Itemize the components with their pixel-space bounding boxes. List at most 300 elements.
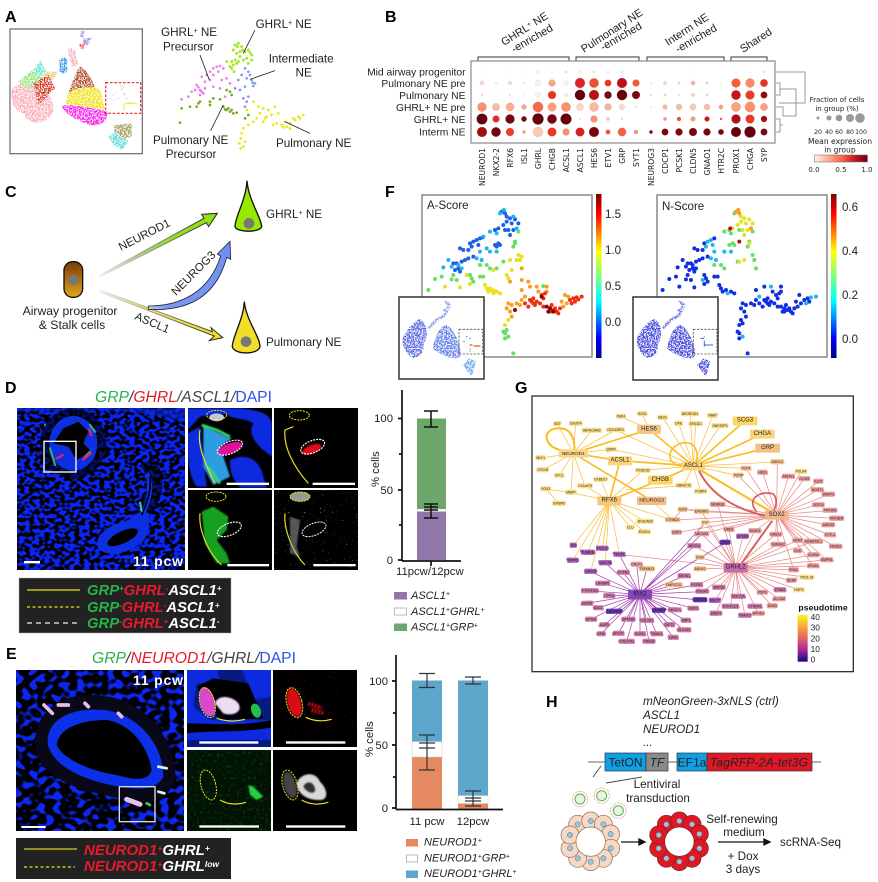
network leaf genes: NEUROD4 (682, 412, 698, 416)
panel D: bar legend (394, 590, 485, 634)
panel D: micrograph legend: ASCL1 (167, 616, 220, 632)
column gene labels: ASCL1 (576, 148, 585, 172)
network leaf genes: LIAS1 (669, 635, 678, 639)
network leaf genes: AMOS1 (783, 474, 794, 478)
rotated group headings: -enriched (674, 22, 719, 56)
panel E: bar legend: GRP (482, 852, 506, 864)
panel D: bar legend: GHRL (450, 606, 481, 618)
panel A: zoomed NE scatter (180, 43, 303, 148)
network leaf genes: DIOR57 (653, 609, 665, 613)
panel E: micrograph legend: low (205, 859, 220, 869)
panel B legends (808, 96, 873, 174)
leader lines for panel A labels (200, 30, 310, 133)
network leaf genes: TSPAN13 (639, 567, 654, 571)
network leaf genes: C12orf75 (578, 484, 592, 488)
network leaf genes: DSP (702, 521, 710, 525)
label: intermediate NE: Intermediate (269, 53, 334, 66)
panel F: A-Score (399, 194, 621, 379)
panel E: micrograph legend: + (205, 843, 210, 853)
panel E: micrograph legend (16, 838, 231, 879)
network hub genes: ASCL1 (684, 463, 703, 469)
network hub genes: HES6 (641, 426, 657, 432)
network leaf genes: CTNNA1 (748, 605, 762, 609)
network leaf genes: YPD1-24 (800, 575, 814, 579)
label: pulmonary NE: Pulmonary NE (276, 137, 352, 150)
network leaf genes: LRRC8 (585, 570, 596, 574)
panel H: medium labels: + Dox (728, 850, 759, 863)
panel E: title: GRP/NEUROD1/GHRL/DAPI (92, 650, 296, 667)
column gene labels: SYP (760, 148, 769, 162)
panel D: ASCL1 channel inset (274, 490, 358, 570)
network leaf genes: MLLT7 (710, 599, 720, 603)
panel B legends: 1.0 (861, 166, 873, 174)
panel E: GHRL channel inset (273, 750, 357, 831)
network leaf genes: AGRIN (582, 601, 593, 605)
network hub genes: NEUROD1 (562, 451, 585, 456)
label GHRL+ NE: + (298, 210, 303, 217)
panel B legends: 0.5 (835, 166, 847, 174)
network leaf genes: PCBP4 (695, 489, 706, 493)
rotated group headings: NE (529, 10, 551, 30)
panel H: TF list: ASCL1 (642, 709, 680, 722)
column gene labels: NKX2-2 (492, 148, 501, 176)
network leaf genes: QDPR (606, 447, 616, 451)
row labels: GHRL+ NE (414, 115, 466, 126)
axis labels: 50 (380, 485, 393, 497)
panel H: virus particles (572, 788, 626, 818)
panel D: bar legend: ASCL1 (411, 622, 446, 634)
GHRL+ NE cell (235, 181, 262, 231)
network hub genes: RFX6 (602, 498, 618, 504)
network leaf genes: SPTA3B (622, 617, 635, 621)
network leaf genes: PTPRF/D3 (582, 589, 598, 593)
network leaf genes: PDPN (758, 591, 768, 595)
network leaf genes: AMOX3 (823, 523, 834, 527)
network leaf genes: SMOC2 (771, 460, 783, 464)
label: GHRL+ NE precursor: Precursor (163, 41, 214, 54)
label NEUROD1: NEUROD1 (117, 217, 172, 254)
network leaf genes: NDNF (787, 579, 796, 583)
panel D: main micrograph (17, 408, 185, 570)
column gene labels: ETV1 (604, 148, 613, 167)
panel H: TF list: mNeonGreen-3xNLS (ctrl) (643, 695, 779, 708)
network leaf genes: SST (554, 422, 561, 426)
network leaf genes: ADAMTSL1 (805, 540, 822, 544)
network leaf genes: CDH3 (720, 541, 730, 545)
panel D: title: GRP/GHRL/ASCL1/DAPI (95, 389, 272, 406)
network leaf genes: MMP7 (566, 491, 576, 495)
column gene labels: CLDN5 (689, 148, 698, 174)
panel D: GHRL channel inset (274, 408, 358, 488)
panel E: bar legend: + (506, 854, 510, 860)
panel B legends: 60 (835, 129, 843, 136)
panel D: micrograph legend: ASCL1 (167, 583, 222, 599)
network leaf genes: ODF15 (813, 503, 824, 507)
axis labels: % cells (364, 721, 376, 757)
panel H: TF list: ... (643, 736, 653, 749)
network leaf genes: GMPR1 (821, 558, 833, 562)
network leaf genes: UBE50B (694, 598, 707, 602)
network leaf genes: APOD3 (753, 611, 764, 615)
axis labels: 0 (382, 803, 388, 815)
network leaf genes: FREM2 (830, 545, 841, 549)
axis labels: 11 pcw (410, 816, 445, 828)
network leaf genes: NNAT (708, 414, 717, 418)
panel H: lentiviral construct: TetON (608, 756, 643, 770)
dots (477, 70, 768, 138)
panel letter B: B (385, 9, 397, 26)
network leaf genes: DNMT3 (823, 493, 834, 497)
panel D: bar legend: + (446, 622, 450, 630)
network hub genes: CHGB (652, 477, 669, 483)
panel D: micrograph legend: GHRL (124, 583, 169, 599)
network leaf genes: HNF2EP3 (713, 424, 728, 428)
rotated group headings: -enriched (510, 22, 555, 56)
N-Score inset UMAP (633, 297, 718, 380)
panel D: bar legend: ASCL1 (411, 590, 446, 602)
arrow ASCL1 (100, 290, 223, 341)
network leaf genes: EDN3 (768, 604, 777, 608)
panel D: main micrograph: 11 pcw (133, 553, 183, 569)
panel D: micrograph legend: + (215, 601, 220, 610)
network leaf genes: MLF1 (536, 456, 545, 460)
network leaf genes: LRRBP5 (596, 581, 609, 585)
label: GHRL+ NE: + (288, 20, 292, 27)
network leaf genes: CLU (627, 526, 634, 530)
panel E: bar legend: NEUROD1 (424, 852, 478, 864)
column gene labels: GNAO1 (703, 148, 712, 175)
N-Score colour bar: 0.2 (842, 290, 858, 302)
network leaf genes: CTNND2 (666, 518, 680, 522)
panel D: micrograph legend: - (164, 601, 167, 610)
network leaf genes: SOX1 (638, 412, 647, 416)
panel E: micrograph legend: NEUROD1 (84, 842, 162, 859)
network leaf genes: SPD3 (793, 538, 802, 542)
panel D: bar legend: + (446, 591, 450, 598)
network leaf genes: COL27A1 (619, 640, 634, 644)
network leaf genes: CLDN4 (808, 553, 819, 557)
column gene labels: CHGA (746, 147, 755, 170)
network leaf genes: MAP1B (713, 585, 725, 589)
panel E: main micrograph (16, 670, 184, 831)
rotated group headings: + (526, 21, 533, 29)
network leaf genes: GBFA2T2 (676, 484, 691, 488)
panel E: bar legend: + (478, 869, 482, 876)
pulmonary NE cell (232, 302, 260, 353)
panel E: micrograph legend: GHRL (162, 858, 220, 875)
network leaf genes (536, 412, 844, 644)
panel D: micrograph legend: + (217, 584, 222, 593)
panel E: micrograph legend: + (157, 859, 162, 869)
network leaf genes: FGFR2 (691, 583, 702, 587)
label airway progenitor: & Stalk cells (39, 318, 105, 332)
A-Score colour bar (596, 194, 621, 358)
network leaf genes: ZNRF3 (711, 611, 722, 615)
panel E: bar legend: + (478, 854, 482, 860)
network leaf genes: CCPB2 (618, 571, 629, 575)
network leaf genes: PCRP (734, 474, 744, 478)
network leaf genes: HOPX (794, 588, 804, 592)
column gene labels: NEUROG3 (647, 148, 656, 186)
panel B legends: 20 (814, 129, 822, 136)
network leaf genes: KCNK12/1 (723, 605, 739, 609)
panel F: N-Score: N-Score (662, 201, 704, 213)
network leaf genes: SLC1A2 (678, 628, 690, 632)
label pulmonary NE: Pulmonary NE (266, 336, 342, 349)
network leaf genes: EFNA1 (808, 564, 819, 568)
panel letter G: G (515, 380, 527, 397)
rotated group headings: GHRL (499, 22, 532, 49)
network leaf genes: SOX11 (635, 632, 645, 636)
axis labels (364, 676, 490, 828)
network leaf genes: BEGN1 (679, 574, 690, 578)
axis labels: 100 (369, 676, 388, 688)
column gene labels: CHGB (548, 148, 557, 170)
panel D: micrograph legend: + (119, 584, 124, 593)
panel H: lentiviral construct: TagRFP-2A-tet3G (710, 756, 808, 770)
column gene labels: SYT1 (632, 148, 641, 167)
panel H: arrow between organoids (621, 839, 645, 845)
network leaf genes: BEX1 (658, 415, 667, 419)
network leaf genes: MEIS3UP (607, 610, 622, 614)
network leaf genes: ALCAM (773, 597, 785, 601)
pseudotime legend: pseudotime (798, 603, 848, 613)
UMAP clusters (11, 31, 132, 150)
panel E: stacked bar chart (364, 655, 503, 828)
panel D: micrograph legend: - (217, 617, 220, 626)
network leaf genes: ITPRG (604, 594, 615, 598)
A-Score colour bar: 0.5 (605, 281, 621, 293)
panel H: scRNA-Seq label: scRNA-Seq (780, 836, 841, 849)
A-Score colour bar: 1.0 (605, 245, 621, 257)
panel H: lentiviral construct: EF1a (678, 756, 707, 770)
A-Score colour bar: 1.5 (605, 209, 621, 221)
column gene labels: PCSK1 (675, 148, 684, 173)
panel B legends: Fraction of cells (810, 96, 865, 104)
rotated group headings: -enriched (598, 20, 644, 54)
rotated group headings: Interm NE (663, 11, 711, 49)
panel D: bar legend: + (446, 607, 450, 614)
panel H: lentiviral construct (588, 753, 821, 783)
network leaf genes: SNP1 (682, 619, 690, 623)
panel D: bar legend: + (474, 622, 478, 630)
network leaf genes: RBMX3 (739, 614, 751, 618)
N-Score colour bar: 0.0 (842, 334, 858, 346)
network leaf genes: CFC1 (555, 474, 564, 478)
panel letter H: H (546, 694, 558, 711)
network leaf genes: UMD1 (724, 527, 734, 531)
column gene labels: RFX6 (506, 148, 515, 168)
network leaf genes: CFC1B (537, 468, 549, 472)
panel D: micrograph legend: GRP (87, 600, 122, 616)
label GHRL+ NE: GHRL (266, 208, 298, 221)
panel H: medium labels: medium (723, 826, 765, 839)
panel E: bar legend: NEUROD1 (424, 836, 478, 848)
panel letter C: C (5, 184, 17, 201)
network leaf genes: GPM (597, 632, 605, 636)
panel D: micrograph legend: GRP (87, 616, 122, 632)
network leaf genes: APLP2 (613, 631, 624, 635)
network leaf genes: MEOX4 (689, 544, 700, 548)
N-Score colour bar: 0.6 (842, 202, 858, 214)
panel H: medium labels: Self-renewing (706, 813, 778, 826)
panel D: micrograph legend: - (119, 617, 122, 626)
A-Score inset UMAP (399, 297, 484, 379)
panel D: merged inset (188, 408, 272, 488)
label: intermediate NE: NE (296, 66, 312, 80)
label: pulmonary NE precursor: Pulmonary NE (153, 134, 229, 147)
plot frame (471, 61, 775, 143)
network leaf genes: SEMA3E (711, 502, 725, 506)
network leaf genes: COL2A1 (640, 619, 653, 623)
network leaf genes: ANXA2 (695, 567, 706, 571)
network leaf genes: CDC42EP1 (607, 428, 624, 432)
column gene labels: ACSL1 (562, 148, 571, 172)
network leaf genes: EPSB3 (737, 535, 748, 539)
panel H: organoid before transduction (561, 812, 620, 871)
network leaf genes: EPEMP1 (695, 510, 709, 514)
network leaf genes: FOLR4 (796, 469, 807, 473)
arrow NEUROD1 (100, 213, 217, 277)
axis labels: 50 (375, 740, 388, 752)
panel letter A: A (5, 9, 17, 26)
network leaf genes: ENP3 (672, 531, 681, 535)
network leaf genes: KRT8EN (830, 516, 844, 520)
network leaf genes: SLK3 (679, 507, 687, 511)
panel B legends: in group (%) (815, 105, 859, 113)
axis labels: 11pcw/12pcw (396, 566, 464, 578)
panel F: A-Score: A-Score (427, 200, 469, 212)
label: GHRL+ NE precursor: NE (198, 26, 217, 39)
panel H: medium labels: 3 days (726, 863, 760, 876)
label ASCL1: ASCL1 (133, 311, 171, 336)
pseudotime legend: 30 (811, 623, 820, 633)
network leaf genes: PCSK1N (636, 468, 650, 472)
network leaf genes: ZKSCAN3 (637, 519, 653, 523)
panel D: micrograph legend: + (164, 617, 169, 626)
column gene labels: PROX1 (732, 148, 741, 173)
network hub genes: ACSL1 (611, 458, 630, 464)
row labels: Mid airway progenitor (367, 68, 466, 78)
network leaf genes: UNC13A (732, 595, 746, 599)
region of interest box (119, 787, 155, 822)
network leaf genes: OLIG5 (799, 477, 809, 481)
network hub genes: GRHL2 (726, 565, 746, 571)
panel E: main micrograph: 11 pcw (133, 672, 183, 688)
label: GHRL+ NE: GHRL (256, 18, 288, 31)
row labels (367, 68, 466, 138)
panel E: micrograph legend: + (157, 843, 162, 853)
column gene labels (478, 147, 769, 186)
panel B legends: in group (824, 146, 856, 154)
pseudotime legend: 40 (811, 612, 820, 622)
axis labels: 100 (374, 413, 393, 425)
panel D: stacked bar chart (370, 390, 464, 578)
column gene labels: NEUROD1 (478, 148, 487, 186)
A-Score scatter (428, 210, 582, 353)
axis labels (370, 413, 464, 578)
panel B legends: 80 (846, 129, 854, 136)
network leaf genes: BUSE4 (750, 529, 761, 533)
panel D: micrograph legend: - (166, 584, 169, 593)
network leaf genes: HEPACAM2 (583, 429, 601, 433)
label: GHRL+ NE precursor: GHRL (161, 26, 217, 39)
network hub genes: SOX2 (769, 512, 785, 518)
network leaf genes: EFNB2 (775, 588, 786, 592)
panel C: lineage diagram (64, 181, 262, 353)
panel E: NEUROD1 channel inset (273, 670, 357, 747)
network leaf genes: PDGFC (697, 590, 709, 594)
panel B legends: Mean expression (808, 137, 872, 146)
network leaf genes: SDC1 (594, 606, 603, 610)
label: GHRL+ NE precursor: + (193, 28, 198, 35)
network leaf genes: GIPT2 (665, 623, 674, 627)
airway progenitor cell (64, 262, 83, 297)
network leaf genes: CRLF1 (631, 562, 642, 566)
panel D: micrograph legend: - (119, 601, 122, 610)
network leaf genes: IGSF3 (689, 606, 698, 610)
pseudotime legend: 0 (811, 654, 816, 664)
network leaf genes: TSGP1 (614, 552, 625, 556)
panel F: N-Score (633, 194, 859, 380)
panel D: bar legend: GRP (450, 622, 474, 634)
panel B legends: 100 (855, 129, 867, 136)
network leaf genes: KLF5 (814, 479, 822, 483)
column gene labels: GRP (618, 148, 627, 164)
network leaf genes: C9orf74 (570, 421, 582, 425)
network leaf genes: NKX2-1 (669, 608, 681, 612)
panel B legends: 40 (825, 129, 833, 136)
panel E: merged inset (187, 668, 272, 747)
panel letter F: F (385, 184, 395, 201)
panel G: gene regulatory network (532, 396, 853, 672)
panel H: TF list: NEUROD1 (643, 723, 700, 736)
panel E: micrograph legend: GHRL (162, 842, 210, 859)
network hub genes: IRX2 (633, 591, 647, 597)
label airway progenitor: Airway progenitor (23, 304, 117, 318)
panel E: bar legend: NEUROD1 (424, 868, 478, 880)
network leaf genes: DPE (675, 421, 683, 425)
panel D: micrograph legend: ASCL1 (165, 600, 220, 616)
panel E: micrograph legend: NEUROD1 (84, 858, 162, 875)
network leaf genes: SEMA3C (771, 542, 786, 546)
network leaf genes: FOLLS (597, 547, 608, 551)
network leaf genes: GVD (794, 549, 802, 553)
row labels: Interm NE (419, 128, 466, 138)
network leaf genes: WNT7B (600, 561, 612, 565)
column gene labels: CDCP1 (661, 148, 670, 174)
network leaf genes: SPTA3 (586, 617, 596, 621)
pseudotime legend: 10 (811, 644, 820, 654)
label NEUROG3: NEUROG3 (170, 249, 218, 298)
column gene labels: ISL1 (520, 148, 529, 164)
N-Score colour bar (831, 194, 859, 358)
network leaf genes: IGFBP5 (553, 501, 565, 505)
label: pulmonary NE precursor: Precursor (166, 148, 216, 161)
column gene labels: GHRL (534, 147, 543, 169)
highlighted NE subset box (106, 83, 141, 113)
network leaf genes: FBN2 (789, 568, 798, 572)
pseudotime legend: 20 (811, 633, 820, 643)
network hub genes: CHGA (754, 431, 771, 437)
panel letter E: E (6, 646, 17, 663)
network leaf genes: PCP4 (742, 466, 750, 470)
network leaf genes: MEGOM (695, 532, 708, 536)
network leaf genes: GRB14 (770, 532, 781, 536)
A-Score colour bar: 0.0 (605, 317, 621, 329)
row labels: Pulmonary NE (399, 91, 466, 102)
label GHRL+ NE: NE (303, 208, 322, 221)
